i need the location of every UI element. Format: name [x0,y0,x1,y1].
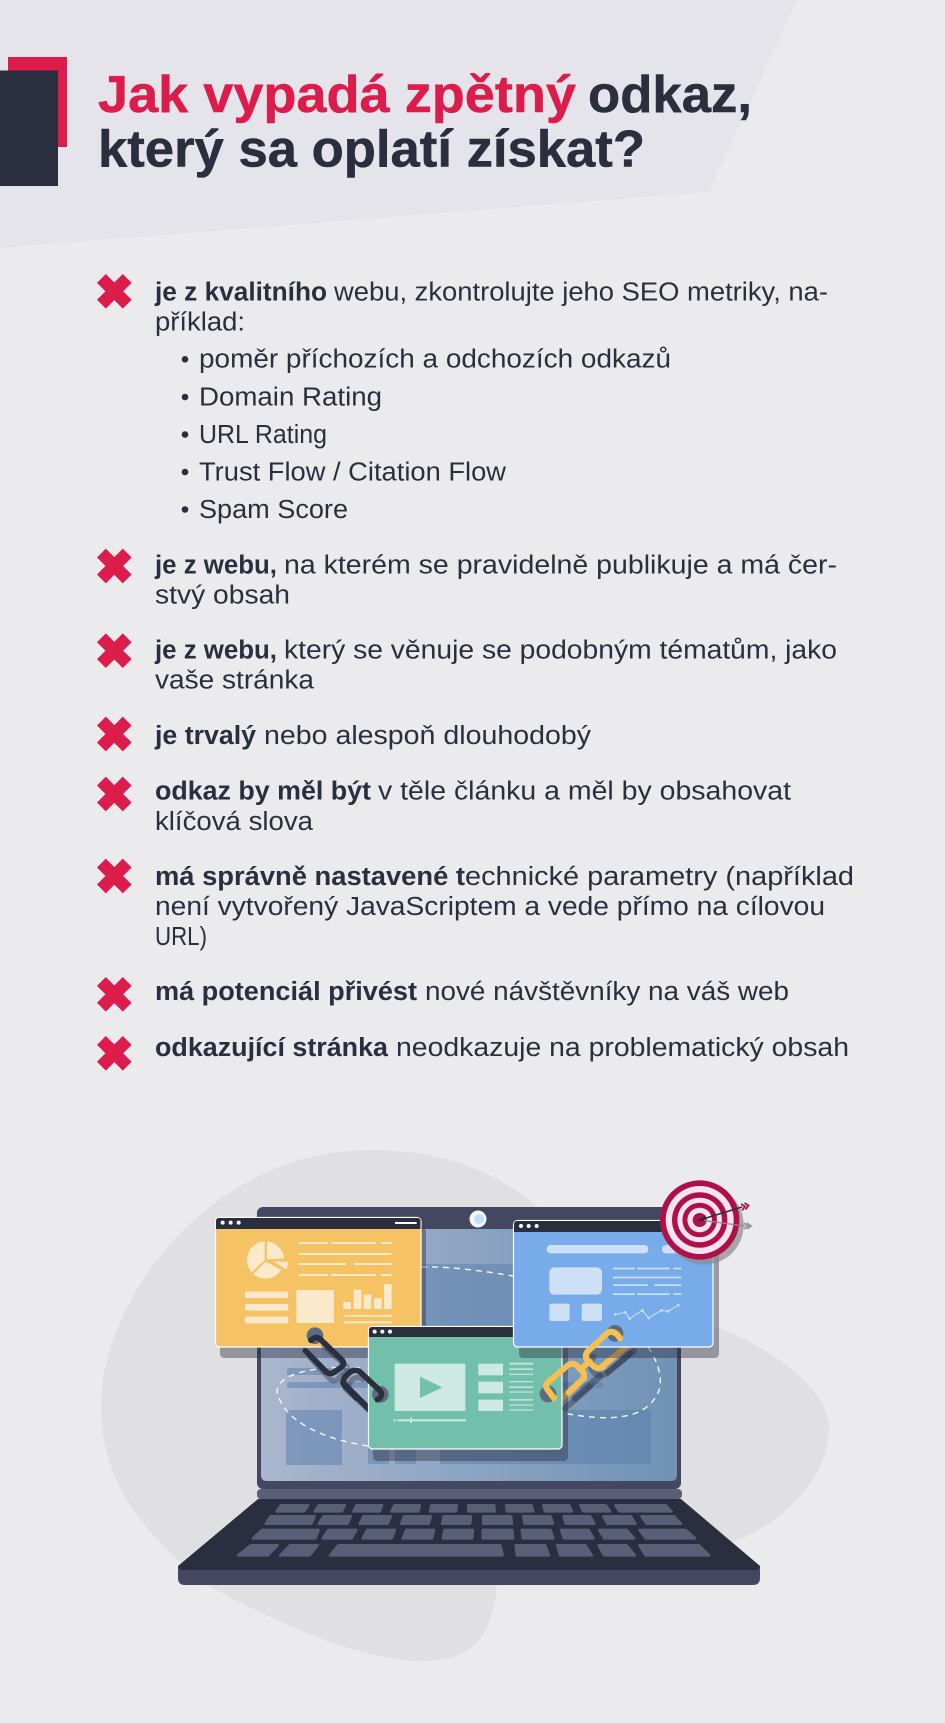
item 1: quality web: webu, zkontrolujte jeho SEO metriky, na- [333,279,828,307]
yellow chain link [540,1325,630,1408]
blue page window [514,1220,719,1358]
item 6: technical parameters [101,863,854,951]
item 2: fresh content: stvý obsah [155,581,290,609]
back strand of yellow chain top link [602,1345,634,1373]
illustration background blob [101,1150,829,1661]
item 2: fresh content: je z webu, [154,551,277,579]
item 1: quality web: příklad: [155,309,245,337]
item 3: similar topics: vaše stránka [155,667,315,695]
item 8: no problematic content: odkazující stránka [155,1034,389,1062]
laptop hinge [257,1489,682,1499]
title: odkaz, [588,66,752,124]
title [98,66,752,179]
item 1: quality web: Trust Flow / Citation Flow [199,458,507,486]
item 7: new visitors: má potenciál přivést [155,978,418,1006]
item 1: quality web: Domain Rating [199,384,382,412]
screen page blocks [286,1264,651,1465]
item 4: permanent [101,721,591,750]
illustration: laptop with linked web pages [178,1180,760,1585]
dashed connection curve [277,1267,660,1446]
item 6: technical parameters: není vytvořený JavaScriptem a vede přímo na cílovou [155,893,825,921]
yellow report window [216,1218,426,1358]
item 5: in article body: odkaz by měl být [155,777,372,805]
title: který sa oplatí získat? [98,121,645,179]
item 2: fresh content: na kterém se pravidelně publikuje a má čer- [284,551,837,579]
laptop base [178,1499,760,1585]
green video window [368,1326,568,1461]
checklist [101,278,854,1066]
item 4: permanent: nebo alespoň dlouhodobý [264,722,591,750]
item 1: quality web: Spam Score [199,496,348,524]
laptop lid [257,1207,681,1489]
item 6: technical parameters: URL) [155,923,207,951]
item 5: in article body: klíčová slova [155,808,314,836]
target with arrows [660,1180,751,1265]
item 5: in article body: v těle článku a měl by obsahovat [378,777,791,805]
back strands of chains [343,1376,600,1414]
item 3: similar topics: který se věnuje se podobným tématům, jako [284,637,837,665]
header background shape [0,0,797,248]
item 8: no problematic content [101,1034,849,1066]
item 7: new visitors: nové návštěvníky na váš web [425,978,789,1006]
item 6: technical parameters: echnické parametry (například [465,863,854,891]
item 1: quality web: je z kvalitního [154,279,327,307]
item 1: quality web [101,278,828,524]
item 2: fresh content [101,551,837,609]
header accent blocks [0,57,67,186]
keyboard [238,1505,709,1555]
dark chain link [305,1327,389,1403]
item 3: similar topics [101,637,837,695]
item 1: quality web: URL Rating [199,421,327,449]
item 4: permanent: je trvalý [154,722,257,750]
item 1: quality web: poměr příchozích a odchozích odkazů [199,346,671,374]
item 8: no problematic content: neodkazuje na problematický obsah [396,1034,849,1062]
item 5: in article body [101,777,791,836]
item 3: similar topics: je z webu, [154,637,277,665]
item 6: technical parameters: má správně nastavené t [155,863,466,891]
title: Jak vypadá zpětný [98,66,576,124]
item 7: new visitors [101,978,789,1007]
